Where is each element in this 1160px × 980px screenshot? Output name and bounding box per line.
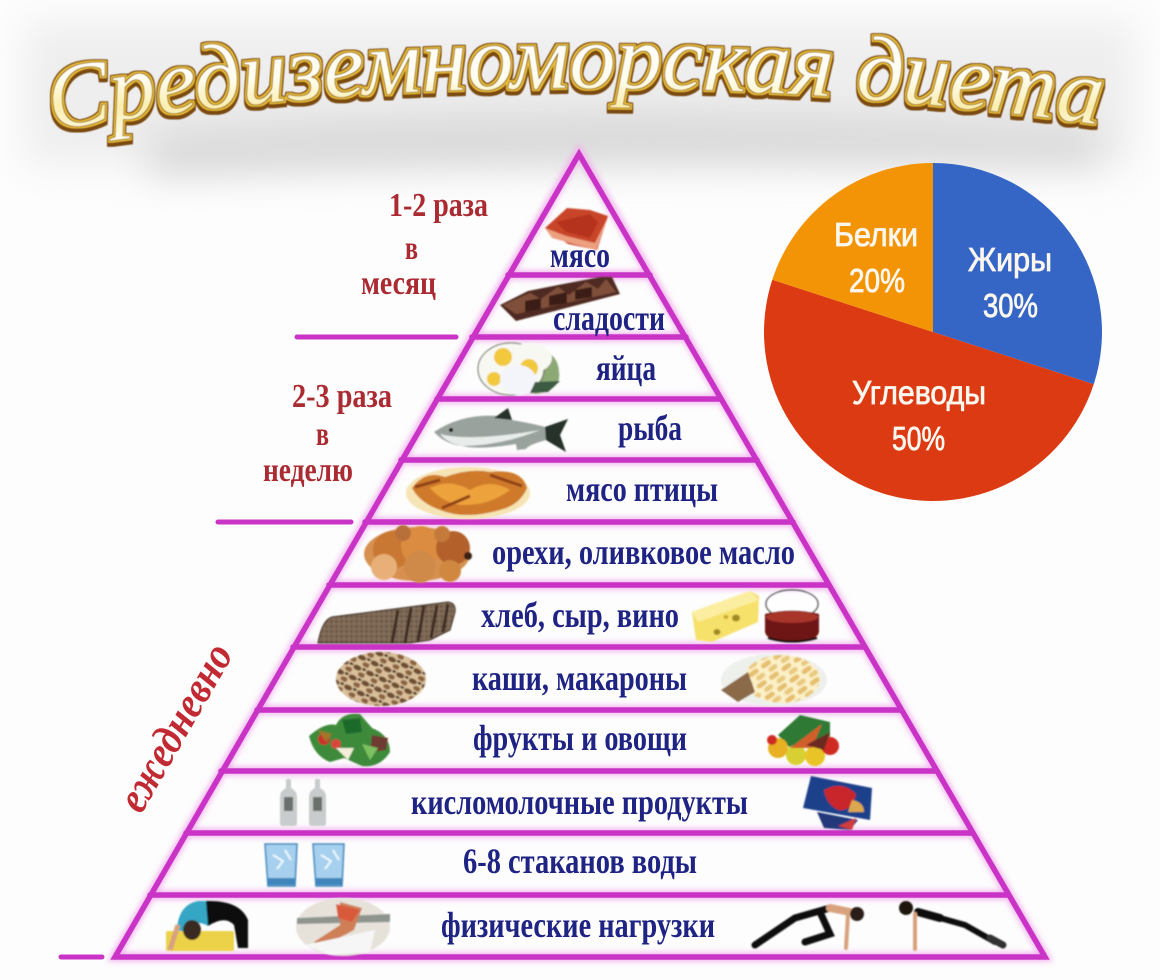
level label: мясо птицы: мясо птицы <box>566 469 718 509</box>
icon: eggs <box>478 343 560 395</box>
level label: кисломолочные продукты: кисломолочные продукты <box>411 782 748 822</box>
icon: wine glass <box>765 590 819 642</box>
pyramid frame <box>115 152 1045 957</box>
frequency label: 2-3 раза в неделю: неделю <box>263 452 353 489</box>
frequency divider lines <box>61 337 456 957</box>
frequency label: 1-2 раза в месяц: в <box>405 230 418 267</box>
icon: glasses of water <box>265 844 344 886</box>
level label: физические нагрузки: физические нагрузки <box>441 905 715 945</box>
slice: Белки <box>772 163 933 332</box>
icon: fish <box>434 408 568 452</box>
level label: орехи, оливковое масло: орехи, оливковое масло <box>492 532 795 572</box>
level label: сладости: сладости <box>553 298 665 338</box>
frequency label: 1-2 раза в месяц: 1-2 раза <box>389 187 488 224</box>
pie value: Белки: 20% <box>849 262 905 299</box>
level label: мясо: мясо <box>550 235 610 275</box>
icon: bread <box>318 602 455 643</box>
slice: Углеводы <box>764 280 1094 501</box>
frequency label: ежедневно: ежедневно <box>107 634 243 820</box>
pie label: Углеводы: Углеводы <box>852 374 986 411</box>
pie value: Углеводы: 50% <box>892 420 945 457</box>
frequency label: 2-3 раза в неделю: 2-3 раза <box>292 378 392 415</box>
icon: salad <box>309 714 390 766</box>
pie label: Белки: Белки <box>834 216 918 253</box>
level label: хлеб, сыр, вино: хлеб, сыр, вино <box>481 595 679 635</box>
slice: Жиры <box>933 163 1102 384</box>
level label: рыба: рыба <box>618 408 682 448</box>
level label: фрукты и овощи: фрукты и овощи <box>473 718 687 758</box>
icon: poultry dish <box>406 467 530 519</box>
icon: stretching on beach <box>296 898 390 956</box>
icon: chocolate <box>500 277 620 321</box>
icon: kefir bottles <box>280 779 326 826</box>
frequency label: 1-2 раза в месяц: месяц <box>361 265 436 302</box>
icon: plank exercise <box>899 901 1003 949</box>
level label: 6-8 стаканов воды: 6-8 стаканов воды <box>463 841 697 881</box>
icon: vegetables <box>767 715 839 766</box>
frequency label: 2-3 раза в неделю: в <box>316 416 329 453</box>
icon: yogurt <box>803 776 872 830</box>
level label: каши, макароны: каши, макароны <box>472 658 687 698</box>
icon: grains <box>336 652 426 706</box>
icon: hazelnuts <box>364 525 472 583</box>
icon: yoga bridge <box>166 901 248 951</box>
pie value: Жиры: 30% <box>983 287 1038 324</box>
icon: meat <box>545 208 608 250</box>
icon: pasta <box>721 654 827 706</box>
icon: mountain climber exercise <box>755 907 864 948</box>
level label: яйца: яйца <box>596 348 656 388</box>
pie label: Жиры: Жиры <box>968 241 1052 278</box>
title: Средиземноморская диета <box>49 32 1106 148</box>
pie chart <box>764 163 1102 501</box>
icon: cheese <box>692 591 759 642</box>
frequency label: 2-3 раза в неделю <box>263 378 392 489</box>
frequency label: 1-2 раза в месяц <box>361 187 488 302</box>
